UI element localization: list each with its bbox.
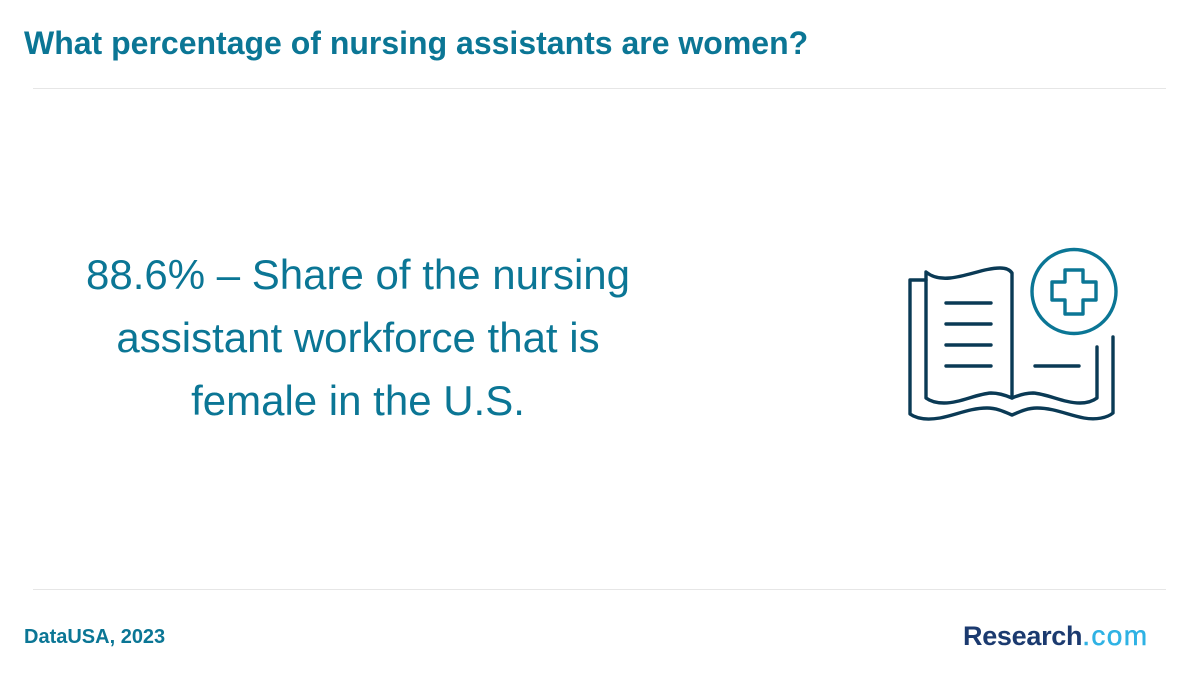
title: What percentage of nursing assistants are women?: [24, 25, 808, 61]
main statistic text: [86, 251, 630, 424]
logo: Research.com: Research.com: [963, 620, 1148, 651]
source citation: DataUSA, 2023: [24, 626, 165, 648]
main statistic text: 88.6% – Share of the nursing: [86, 251, 630, 298]
main statistic text: female in the U.S.: [191, 377, 525, 424]
icon: medical book: [908, 248, 1118, 421]
main statistic text: assistant workforce that is: [116, 314, 600, 361]
